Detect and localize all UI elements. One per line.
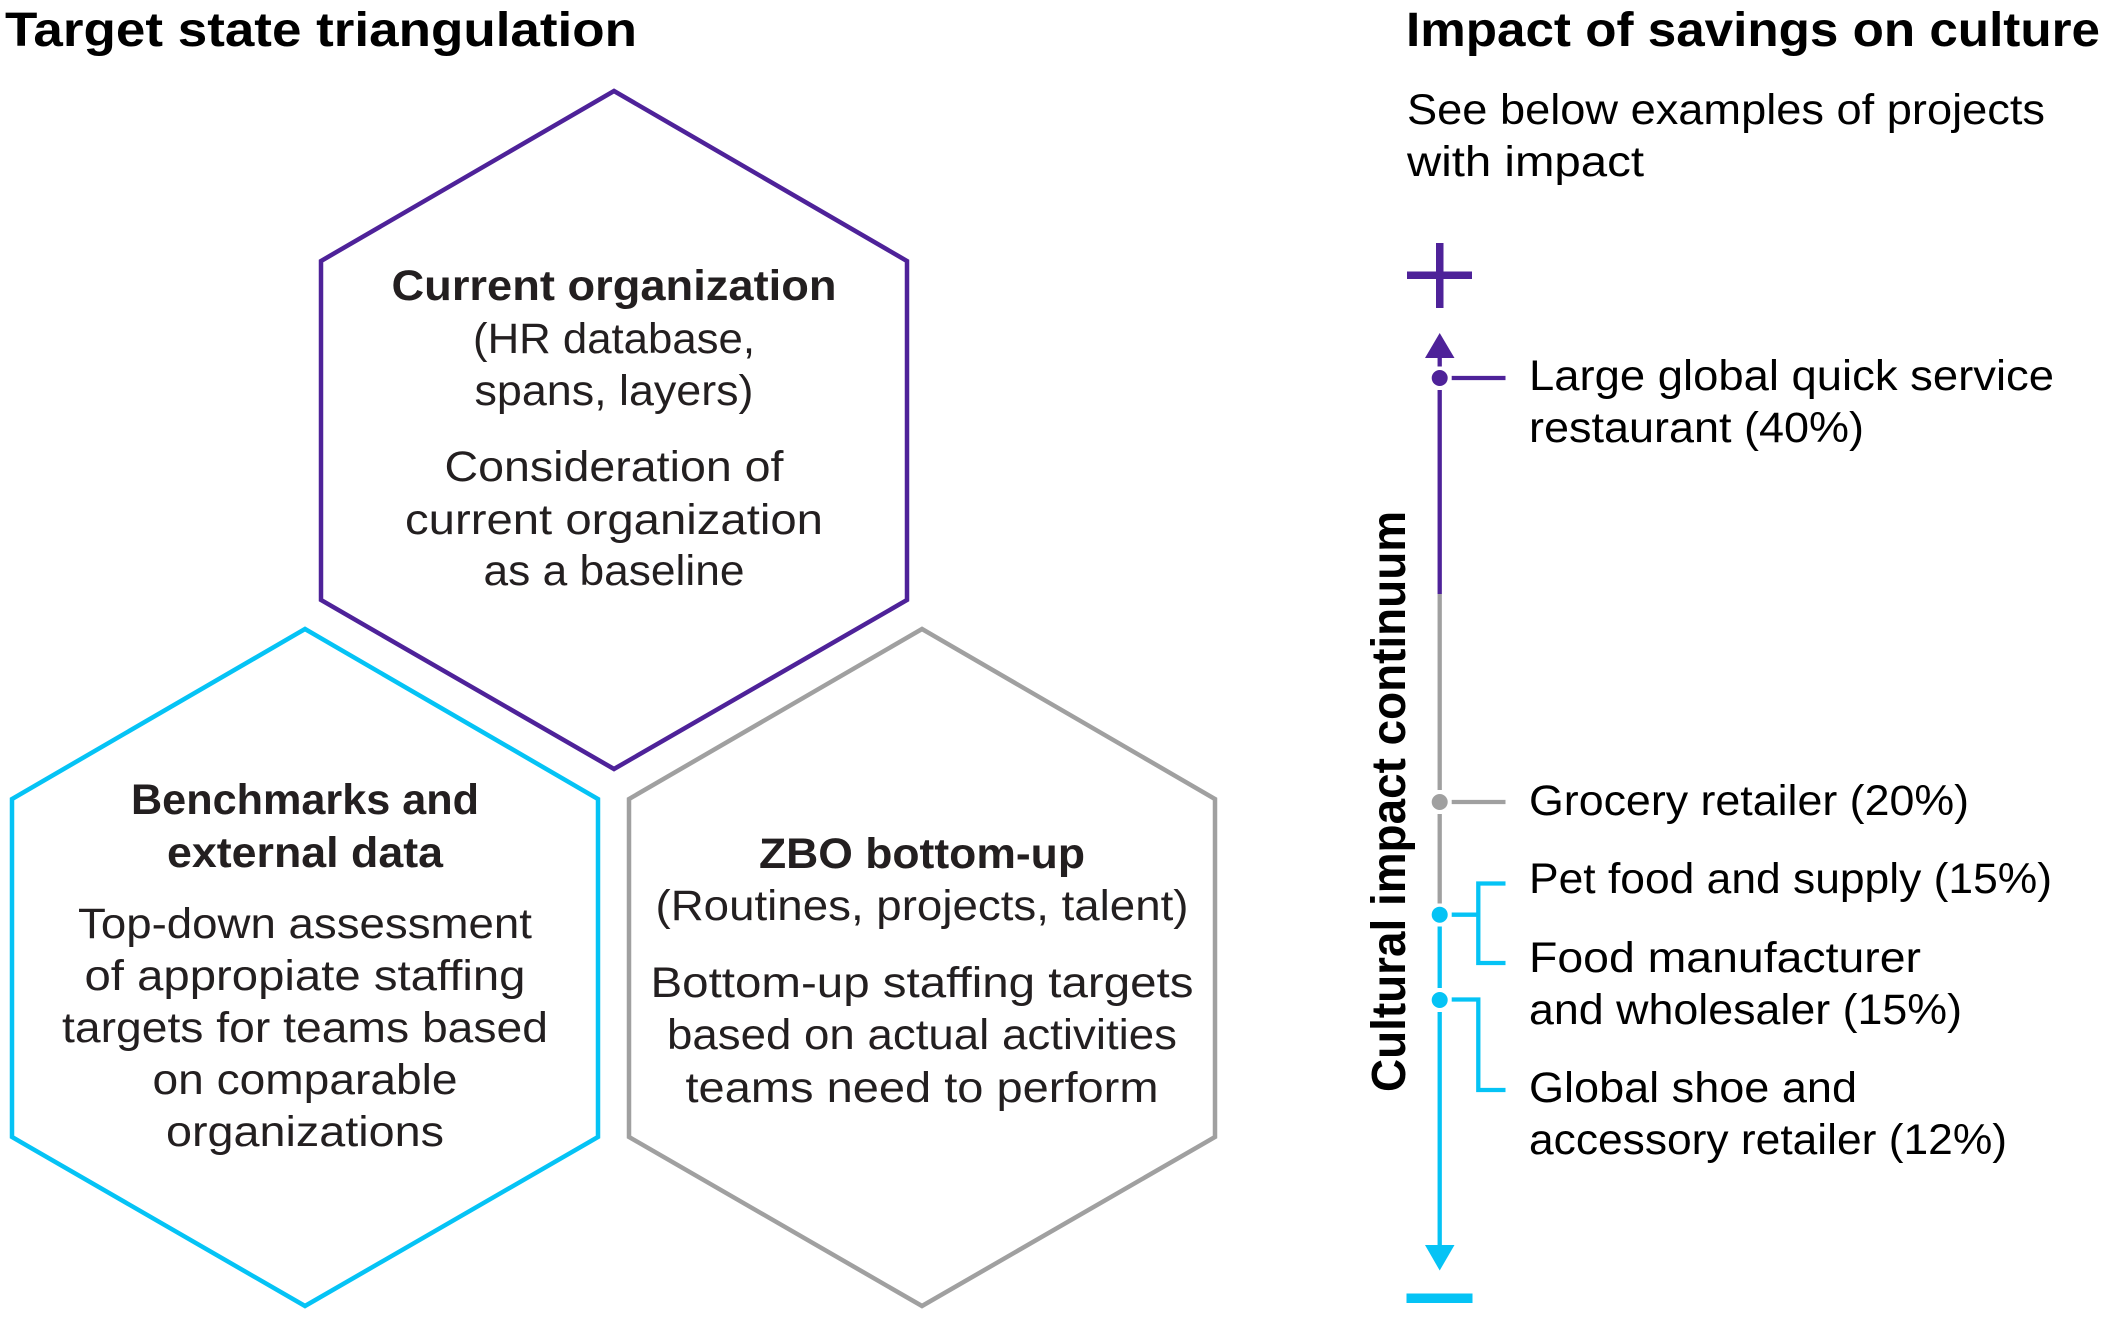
text: ZBO bottom-up: based on actual activities <box>667 1011 1177 1059</box>
text: current organization: current organization <box>405 496 823 544</box>
text: current organization: as a baseline <box>484 547 744 595</box>
label: quick service restaurant: Large global quick service <box>1529 352 2054 400</box>
text: benchmarks and external data: organizations <box>166 1108 444 1156</box>
marker: pet food and food manufacturer <box>1432 884 1506 963</box>
title: target state triangulation: Target state triangulation <box>5 4 637 57</box>
subtitle: See below examples of projects <box>1407 86 2045 134</box>
text: benchmarks and external data: of appropiate staffing <box>84 952 526 1000</box>
marker: global shoe retailer <box>1432 992 1506 1090</box>
panel: current organization hexagon <box>321 91 907 769</box>
label: global shoe retailer: accessory retailer (12%) <box>1529 1116 2007 1164</box>
label: pet food and supply: Pet food and supply (15%) <box>1529 855 2052 903</box>
text: benchmarks and external data: targets for teams based <box>62 1004 548 1052</box>
label: global shoe retailer <box>1529 1064 2007 1164</box>
label: quick service restaurant <box>1529 352 2054 452</box>
hexagon outline: gray <box>629 629 1215 1306</box>
text: benchmarks and external data: external data <box>167 829 444 877</box>
hexagon outline: purple <box>321 91 907 769</box>
subtitle <box>1406 86 2045 186</box>
text: ZBO bottom-up: ZBO bottom-up <box>759 830 1085 878</box>
title: impact of savings on culture: Impact of savings on culture <box>1406 4 2100 57</box>
hexagon outline: cyan <box>12 629 598 1306</box>
icon: minus sign <box>1406 1294 1472 1303</box>
text: current organization <box>392 262 836 595</box>
vertical axis label: Cultural impact continuum <box>1363 511 1416 1092</box>
text: benchmarks and external data: Top-down assessment <box>78 900 532 948</box>
icon: plus sign <box>1407 243 1472 308</box>
arrowhead: down <box>1425 1245 1454 1270</box>
marker: quick service restaurant <box>1432 370 1506 386</box>
panel: ZBO bottom-up hexagon <box>629 629 1215 1306</box>
text: ZBO bottom-up <box>650 830 1194 1112</box>
panel: benchmarks hexagon <box>12 629 598 1306</box>
label: food manufacturer: and wholesaler (15%) <box>1529 986 1962 1034</box>
continuum arrow axis <box>1425 333 1454 1270</box>
text: current organization: (HR database, <box>473 315 755 363</box>
text: current organization: Current organization <box>392 262 836 310</box>
arrowhead: up <box>1425 333 1454 358</box>
text: benchmarks and external data <box>62 776 548 1156</box>
text: current organization: spans, layers) <box>474 367 754 415</box>
text: benchmarks and external data: Benchmarks and <box>131 776 479 824</box>
text: benchmarks and external data: on comparable <box>152 1056 457 1104</box>
label: quick service restaurant: restaurant (40%) <box>1529 404 1864 452</box>
label: food manufacturer <box>1529 934 1962 1034</box>
label: grocery retailer: Grocery retailer (20%) <box>1529 777 1969 825</box>
label: food manufacturer: Food manufacturer <box>1529 934 1921 982</box>
text: ZBO bottom-up: teams need to perform <box>686 1064 1158 1112</box>
text: ZBO bottom-up: Bottom-up staffing targets <box>650 959 1194 1007</box>
label: global shoe retailer: Global shoe and <box>1529 1064 1857 1112</box>
text: ZBO bottom-up: (Routines, projects, talent) <box>656 882 1188 930</box>
marker: grocery retailer <box>1432 794 1506 810</box>
text: current organization: Consideration of <box>444 443 785 491</box>
subtitle: with impact <box>1406 138 1644 186</box>
